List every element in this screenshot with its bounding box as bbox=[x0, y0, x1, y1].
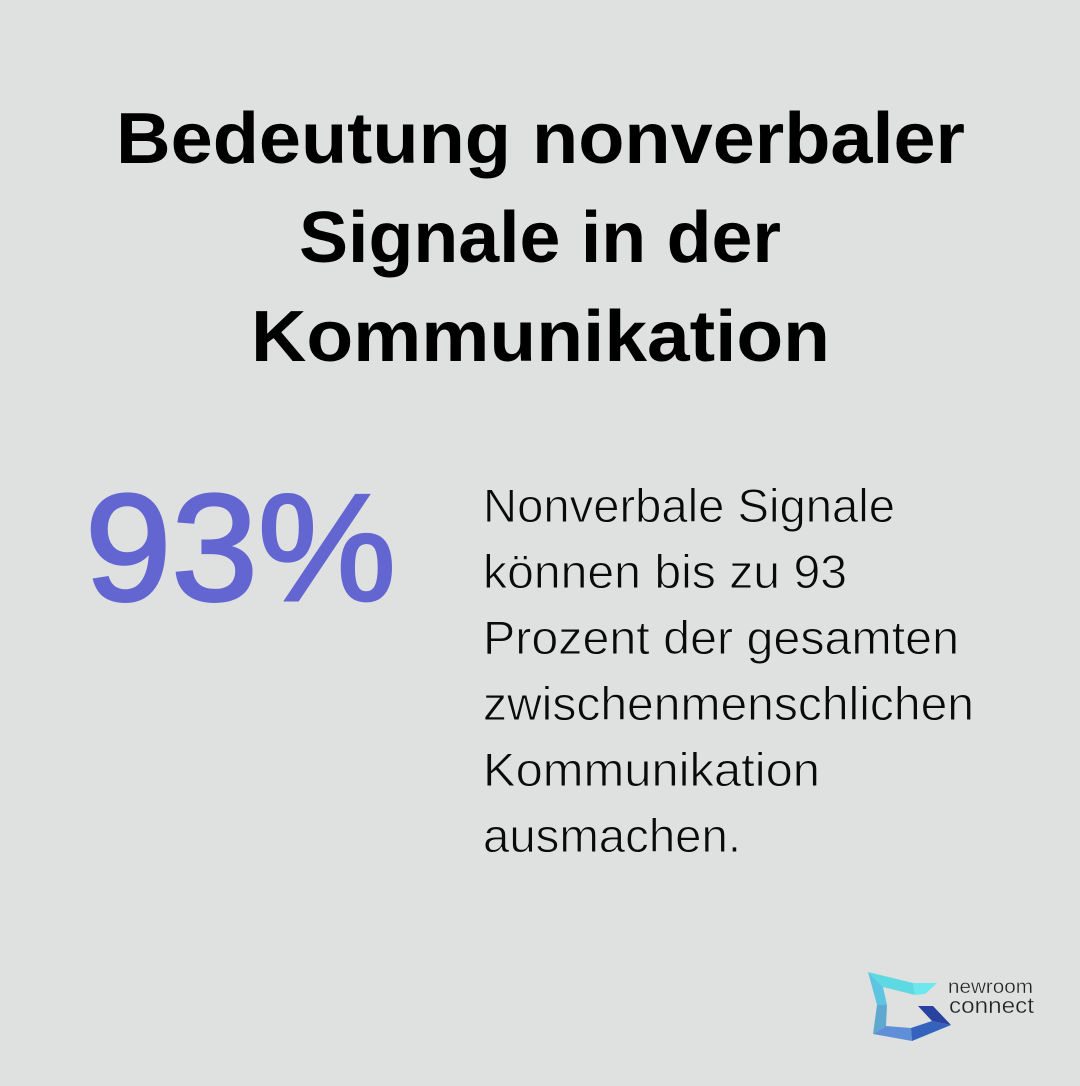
title bbox=[116, 99, 965, 377]
icon: logo mark bbox=[868, 972, 951, 1041]
title: Signale in der bbox=[299, 198, 781, 278]
description text: Prozent der gesamten bbox=[483, 611, 959, 664]
logo wordmark: newroom bbox=[948, 977, 1033, 998]
logo wordmark bbox=[948, 977, 1034, 1018]
description text: Kommunikation bbox=[483, 743, 820, 796]
description text bbox=[483, 479, 974, 862]
description text: können bis zu 93 bbox=[483, 545, 847, 598]
big statistic: 93%: 93% bbox=[85, 463, 396, 633]
logo wordmark: connect bbox=[949, 993, 1034, 1018]
description text: ausmachen. bbox=[483, 809, 741, 862]
description text: Nonverbale Signale bbox=[483, 479, 895, 532]
description text: zwischenmenschlichen bbox=[483, 677, 974, 730]
logo: newroom connect bbox=[868, 972, 1034, 1041]
title: Kommunikation bbox=[251, 297, 830, 377]
title: Bedeutung nonverbaler bbox=[116, 99, 965, 179]
